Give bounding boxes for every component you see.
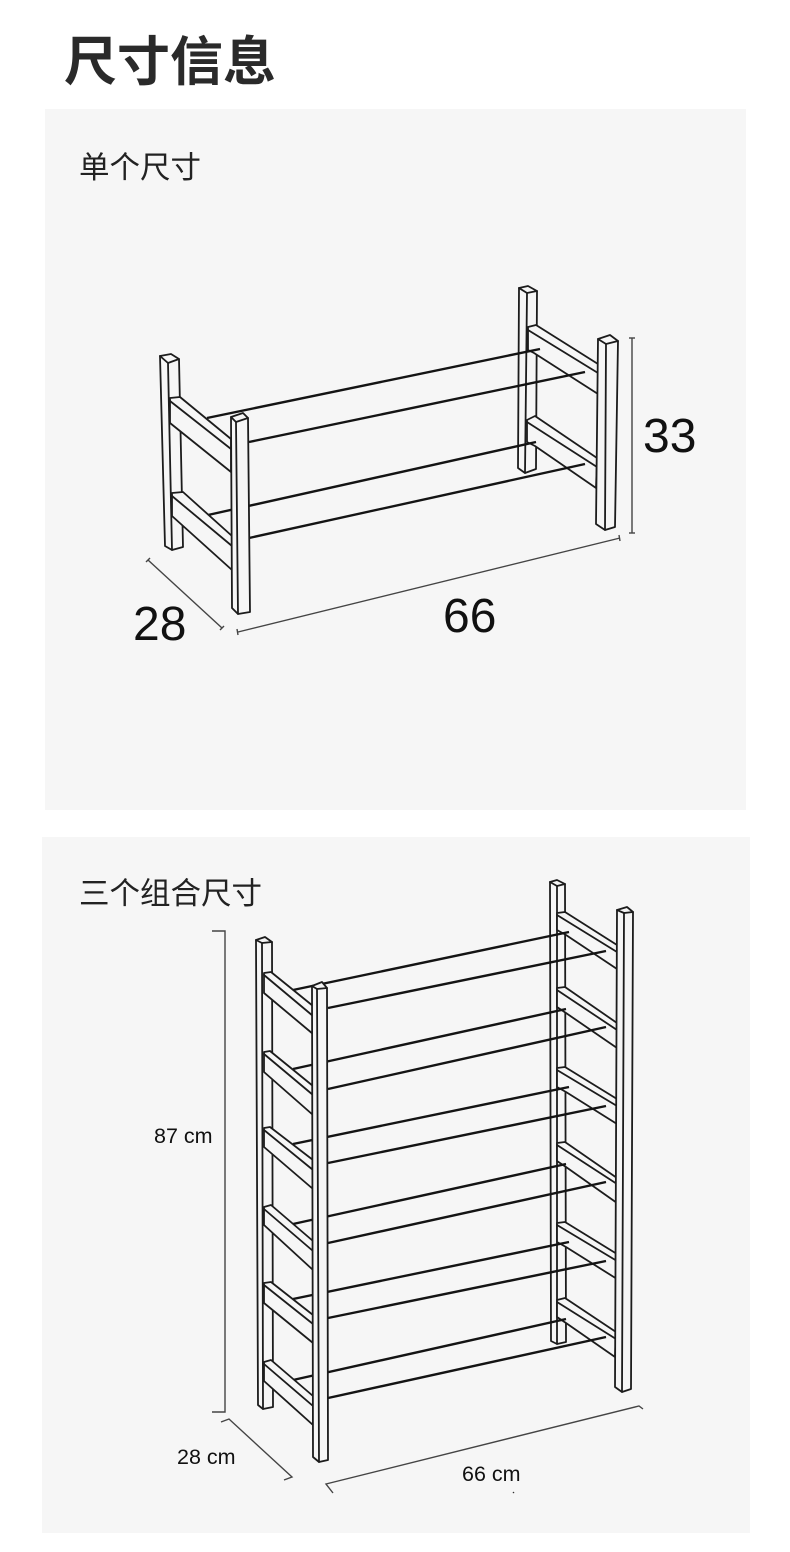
- left crossbars: [170, 397, 232, 570]
- heading: single size: 单个尺寸: [79, 151, 201, 185]
- dimension line: width: [237, 535, 620, 635]
- left front post: [312, 982, 328, 1462]
- right front post: [615, 907, 633, 1392]
- label: 87 cm: 87 cm: [154, 1124, 213, 1148]
- panel: combined size: [42, 837, 750, 1533]
- title: 尺寸信息: [64, 33, 276, 92]
- label: 66 cm: 66 cm: [462, 1462, 521, 1486]
- steel rods: [207, 349, 585, 538]
- left crossbars: [264, 972, 313, 1425]
- label: 66: 66: [443, 590, 496, 643]
- right rear post: [518, 286, 537, 473]
- left front post: [231, 413, 250, 614]
- label: 33: 33: [643, 410, 696, 463]
- dimension line: height: [629, 338, 635, 533]
- left rear post: [160, 354, 183, 550]
- left rear post: [256, 937, 273, 1409]
- right rear post: [550, 880, 566, 1344]
- right crossbars: [557, 912, 617, 1357]
- label: 28: 28: [133, 598, 186, 651]
- dimension line: depth: [146, 558, 224, 630]
- heading: combined size: 三个组合尺寸: [79, 877, 262, 911]
- dimension bracket: width: [326, 1406, 643, 1493]
- dimension bracket: depth: [221, 1419, 292, 1480]
- speck below width label: [513, 1492, 514, 1493]
- diagram: single shelf: [133, 286, 696, 651]
- diagram: three stacked shelves: [154, 880, 643, 1493]
- label: 28 cm: 28 cm: [177, 1445, 236, 1469]
- steel rods: [293, 932, 606, 1398]
- right front post: [596, 335, 618, 530]
- dimension bracket: height: [212, 931, 225, 1412]
- right crossbars: [527, 325, 598, 488]
- panel: single size: [45, 109, 746, 810]
